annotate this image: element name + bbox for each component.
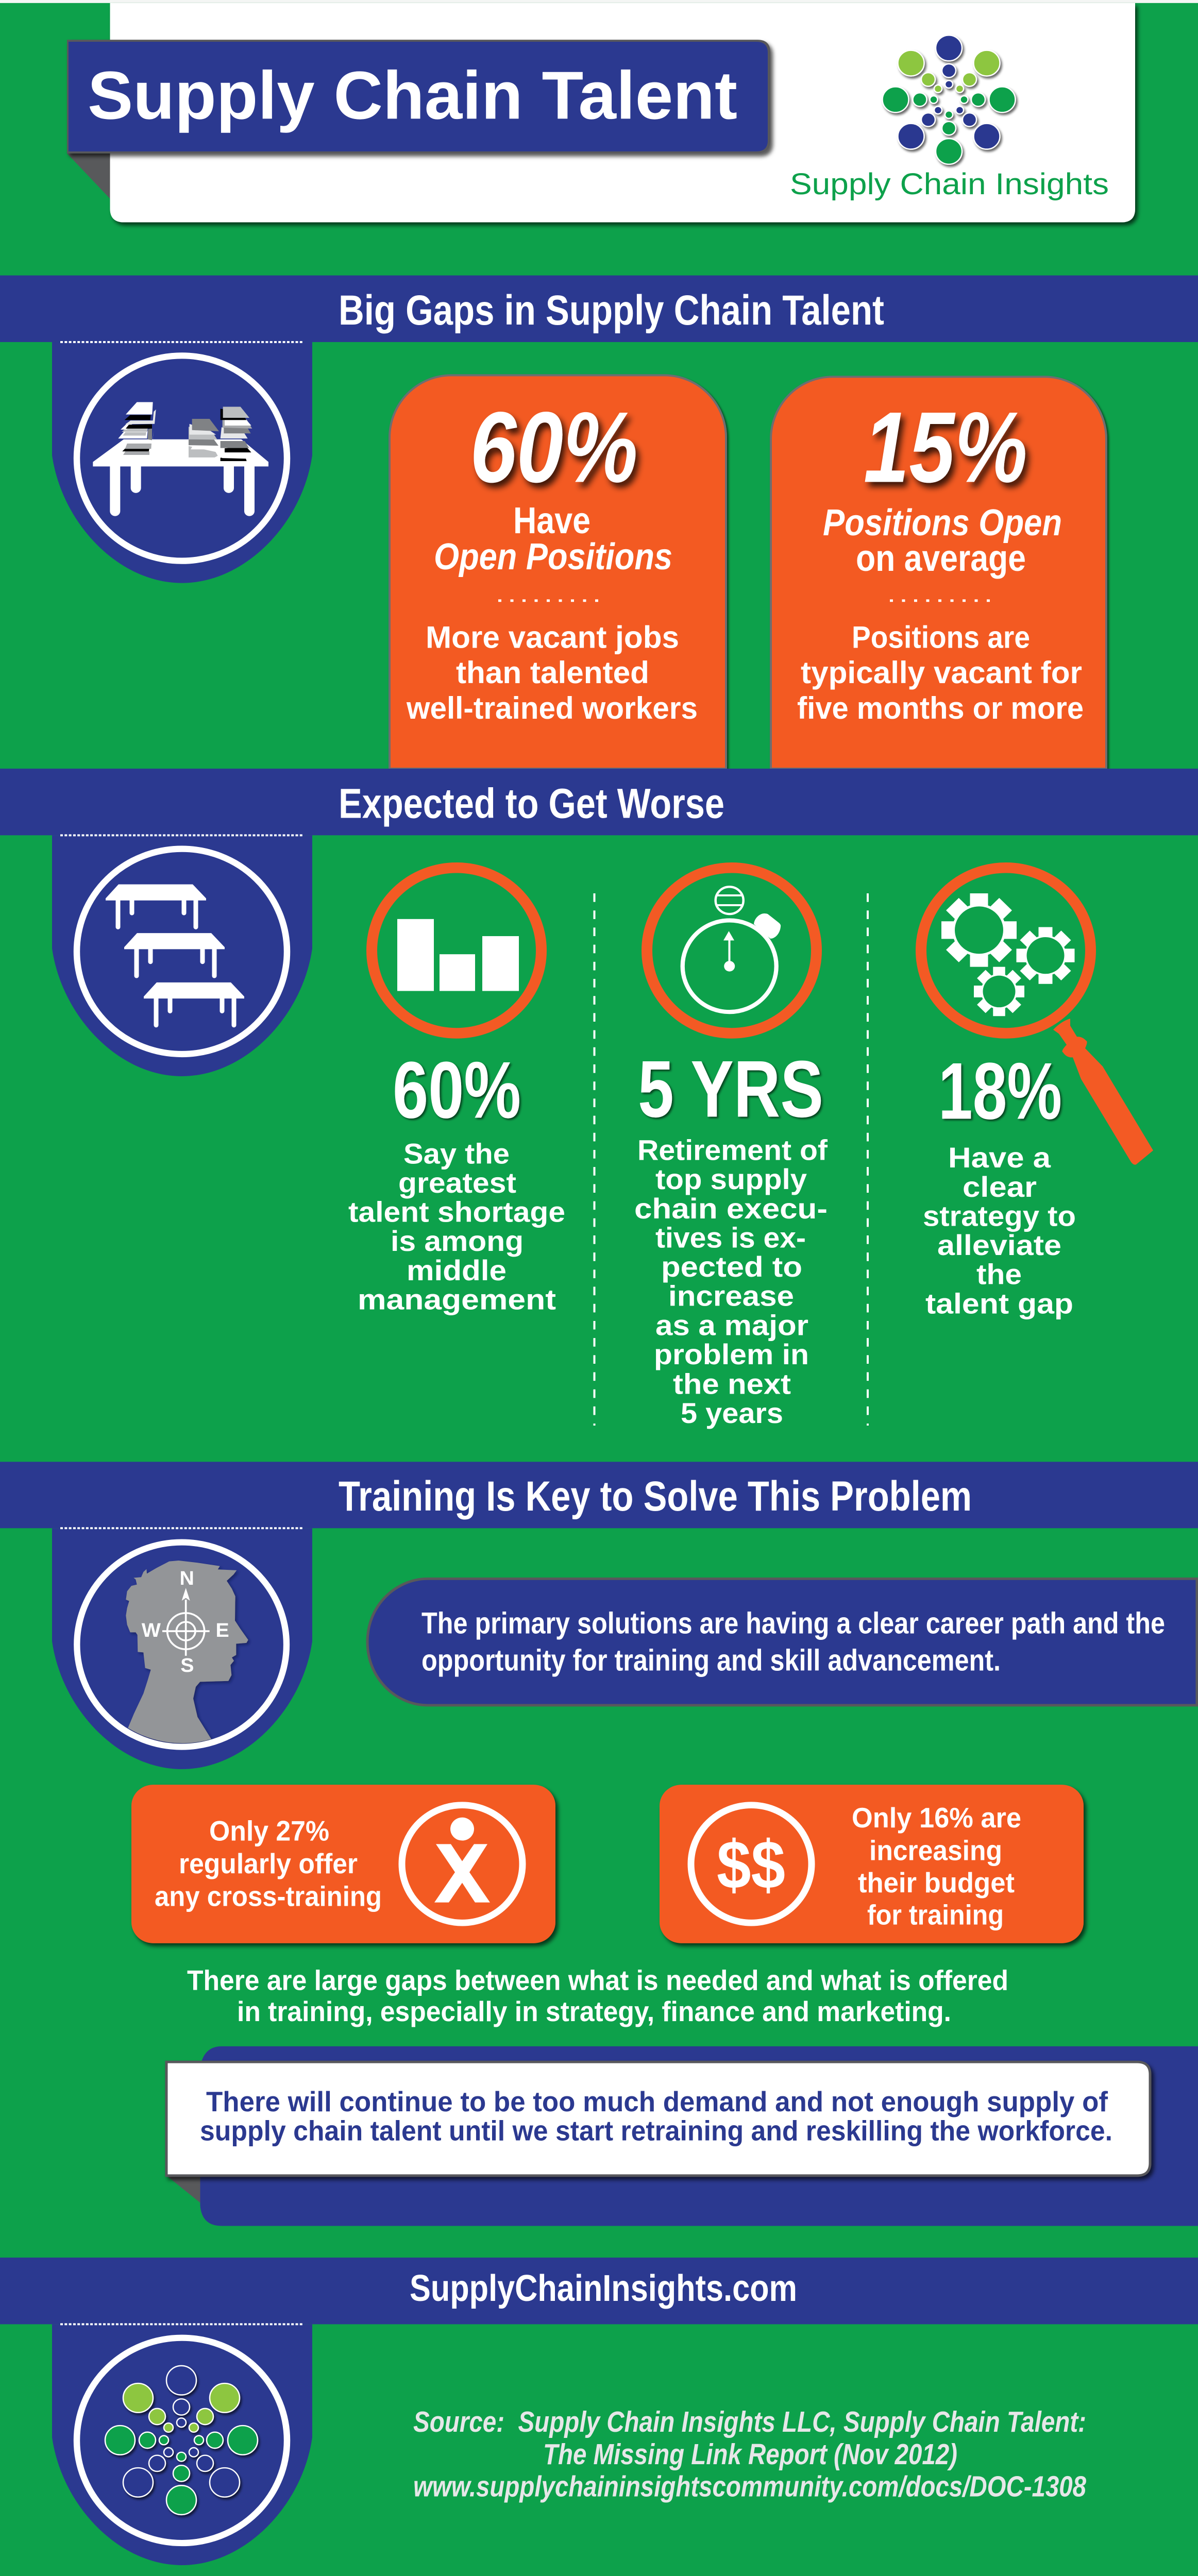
description: Have a: [948, 1142, 1051, 1174]
description: chain execu-: [634, 1192, 828, 1225]
white header card: [110, 3, 1135, 223]
note text: supply chain talent until we start retraining and reskilling the workforce.: [200, 2115, 1112, 2146]
icon: dollars in circle: [691, 1805, 812, 1923]
icon: magnifier with gears: [921, 868, 1153, 1165]
description: [348, 1138, 565, 1315]
title banner: [67, 40, 770, 154]
description: management: [358, 1283, 556, 1315]
text: [852, 1802, 1021, 1930]
description: middle: [407, 1254, 507, 1286]
panel: 60% have open positions: [390, 375, 726, 769]
ribbon icon: head with compass: N: [179, 1568, 194, 1589]
callout text: opportunity for training and skill advancement.: [421, 1643, 1001, 1677]
stat: 60%: [393, 1045, 521, 1135]
description: tives is ex-: [655, 1222, 806, 1253]
label: on average: [856, 538, 1026, 579]
text: [155, 1815, 382, 1912]
description: clear: [963, 1171, 1037, 1203]
note text: There will continue to be too much demand and not enough supply of: [206, 2086, 1108, 2117]
description: talent shortage: [348, 1196, 565, 1228]
stat: 15%: [864, 391, 1027, 503]
description: [634, 1134, 828, 1429]
title: Supply Chain Talent: [88, 58, 737, 133]
ribbon icon: head with compass: S: [180, 1654, 194, 1676]
icon: person in circle: [402, 1805, 522, 1923]
text block: training gaps: [187, 1964, 1008, 2027]
panel: header: [67, 3, 1135, 223]
description: five months or more: [797, 691, 1084, 725]
description: More vacant jobs: [426, 620, 679, 654]
description: typically vacant for: [801, 655, 1082, 690]
description: 5 years: [681, 1397, 783, 1429]
ribbon icon: head with compass: [52, 1528, 312, 1769]
description: Positions are: [852, 620, 1030, 654]
description: alleviate: [937, 1229, 1061, 1261]
heading: SupplyChainInsights.com: [410, 2268, 797, 2309]
white note: [166, 2062, 1150, 2176]
heading: Training Is Key to Solve This Problem: [339, 1472, 972, 1520]
section band: Training Is Key: [0, 1462, 1198, 1528]
logo: dot flower: [882, 35, 1015, 164]
description: the: [976, 1258, 1022, 1291]
column: 60% talent shortage: [348, 868, 565, 1315]
icon: bar chart in ring: [372, 868, 541, 1033]
ribbon icon: head with compass: E: [216, 1620, 229, 1641]
description: the next: [673, 1368, 791, 1400]
gear small: [974, 967, 1024, 1016]
description: pected to: [661, 1251, 802, 1283]
panel: cross-training: [131, 1785, 555, 1943]
description: greatest: [398, 1167, 516, 1199]
heading: Big Gaps in Supply Chain Talent: [339, 286, 884, 334]
column: 18% clear strategy: [921, 868, 1153, 1319]
ribbon icon: table with paper stacks: [52, 342, 312, 583]
description: Retirement of: [637, 1134, 828, 1166]
callout: primary solutions: [367, 1579, 1197, 1705]
heading: Expected to Get Worse: [339, 779, 724, 827]
blue backing: [200, 2046, 1198, 2226]
text: increasing: [869, 1835, 1002, 1866]
panel: conclusion callout: [166, 2046, 1198, 2226]
ribbon icon: logo dots: [52, 2324, 312, 2565]
panel: training budget: [660, 1785, 1084, 1943]
note text: [200, 2086, 1112, 2146]
ribbon fold: [166, 2176, 200, 2203]
label: [823, 502, 1062, 579]
text: any cross-training: [155, 1880, 382, 1912]
description: Say the: [403, 1138, 510, 1170]
text block: training gaps: in training, especially in strategy, finance and marketing.: [237, 1996, 951, 2027]
gear medium: [1016, 927, 1075, 984]
logo wordmark: Supply Chain Insights: [790, 167, 1109, 201]
text: Only 27%: [209, 1815, 329, 1846]
stat: 60%: [470, 391, 638, 503]
description: talent gap: [925, 1287, 1073, 1319]
ribbon fold: [67, 154, 110, 199]
text: Only 16% are: [852, 1802, 1021, 1834]
description: well-trained workers: [406, 691, 698, 725]
callout text: [421, 1606, 1165, 1677]
icon: dollars in circle: $$: [717, 1827, 785, 1903]
source citation: [413, 2405, 1086, 2503]
description: than talented: [456, 655, 649, 690]
description: top supply: [655, 1163, 807, 1195]
section band: Expected to Get Worse: [0, 769, 1198, 835]
section band: website: [0, 2258, 1198, 2324]
text: regularly offer: [179, 1848, 358, 1879]
label: Open Positions: [434, 536, 672, 578]
description: increase: [668, 1280, 794, 1312]
description: [923, 1142, 1076, 1319]
label: Positions Open: [823, 502, 1062, 544]
text: their budget: [858, 1867, 1015, 1899]
icon: stopwatch in ring: [647, 868, 816, 1033]
label: [434, 500, 672, 578]
ribbon icon: head with compass: W: [142, 1620, 161, 1641]
panel: 15% positions open: [771, 377, 1106, 769]
description: [797, 620, 1084, 725]
source citation: The Missing Link Report (Nov 2012): [543, 2438, 957, 2471]
description: strategy to: [923, 1200, 1076, 1232]
description: as a major: [655, 1309, 808, 1341]
gear large: [941, 893, 1017, 967]
column: 5 YRS retirement: [634, 868, 828, 1429]
ribbon icon: three tables: [52, 835, 312, 1076]
section band: Big Gaps: [0, 276, 1198, 342]
stat: 5 YRS: [638, 1044, 823, 1134]
text: for training: [867, 1899, 1004, 1930]
stat: 18%: [938, 1046, 1062, 1136]
description: [406, 620, 698, 725]
description: is among: [391, 1225, 524, 1257]
text block: training gaps: There are large gaps between what is needed and what is offered: [187, 1964, 1008, 1996]
label: Have: [513, 500, 590, 541]
description: problem in: [654, 1338, 809, 1370]
